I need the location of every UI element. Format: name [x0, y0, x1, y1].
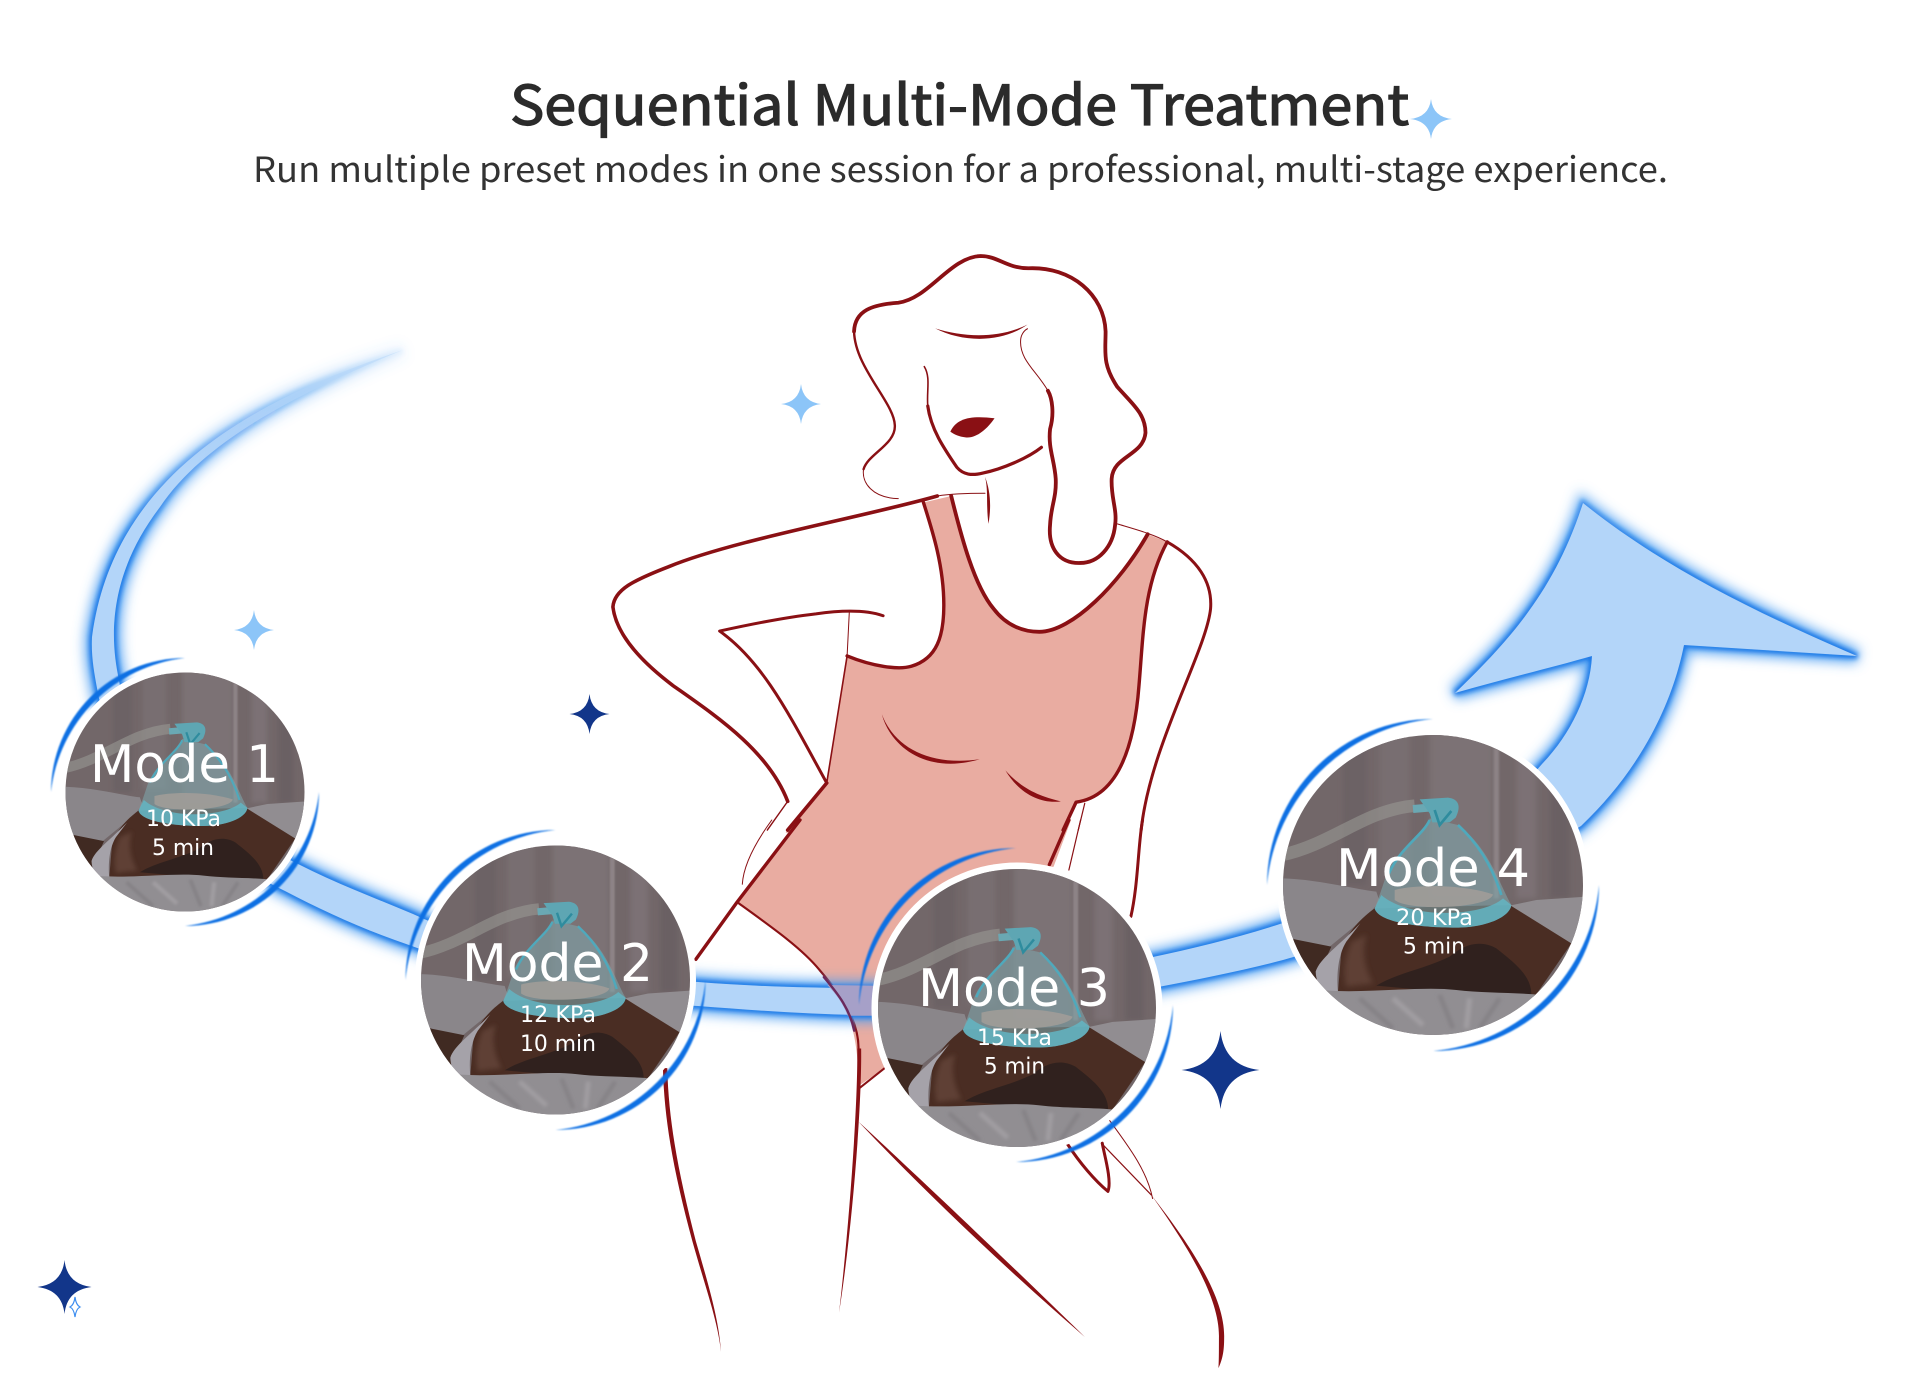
fringe [935, 325, 1028, 339]
mode 4 badge [1267, 719, 1599, 1051]
arcs mode 2 [406, 830, 706, 1130]
upper body outline [613, 256, 1211, 830]
photo mode 2 [418, 843, 693, 1117]
arm inner [720, 611, 883, 783]
label mode 1: 10 KPa [146, 807, 221, 832]
label mode 1 [90, 735, 279, 861]
arcs mode 3 [859, 848, 1173, 1162]
inner leg diagonal [859, 1122, 1085, 1337]
hand hook [1068, 1143, 1109, 1191]
bust curve right [1005, 770, 1061, 802]
sparkle: title [1410, 99, 1452, 139]
left thigh [663, 1068, 721, 1352]
label mode 2 [462, 934, 653, 1057]
mode 3 badge [859, 848, 1173, 1162]
label mode 1: 5 min [152, 836, 214, 861]
lips [950, 417, 995, 438]
photo mode 3 [875, 866, 1159, 1150]
dress upper [786, 496, 1167, 833]
thin arm end [742, 820, 772, 884]
band overlap on dress [824, 977, 880, 1031]
underarm thin line [847, 613, 849, 656]
thin hip line [1078, 803, 1085, 830]
label mode 2: 10 min [520, 1032, 596, 1057]
label mode 2: 12 KPa [520, 1003, 596, 1028]
dress hip edge [696, 820, 800, 959]
label mode 3: 5 min [984, 1054, 1045, 1080]
hair left side [854, 331, 895, 469]
sparkle: bottom left [38, 1260, 92, 1317]
sparkle: dark large [1182, 1031, 1260, 1109]
label mode 3 [918, 959, 1110, 1080]
photo mode 1 [63, 670, 307, 914]
label mode 4: 5 min [1403, 934, 1465, 960]
crotch edge [860, 1068, 885, 1088]
glowing progress band and arrow [92, 350, 1857, 1015]
arm top and hip [613, 496, 937, 801]
label mode 3: Mode 3 [918, 959, 1110, 1019]
right arm lower [1131, 820, 1143, 916]
label mode 4: Mode 4 [1336, 839, 1530, 899]
armhole [847, 502, 944, 668]
neckline [951, 496, 1148, 632]
label mode 2: Mode 2 [462, 934, 653, 994]
woman line-art figure [613, 256, 1224, 1368]
dress right lower [1049, 820, 1069, 865]
neck line [985, 477, 990, 524]
label mode 3: 15 KPa [977, 1026, 1052, 1051]
title: Sequential Multi-Mode Treatment [510, 61, 1409, 141]
label mode 1: Mode 1 [90, 735, 279, 795]
sparkle: left upper [234, 610, 274, 650]
inner thigh [839, 1049, 861, 1313]
right arm [1141, 542, 1211, 830]
hair thin strands [863, 329, 1048, 499]
thin right line [1069, 820, 1081, 870]
thin finger line [1109, 1120, 1153, 1199]
wrist to hip [767, 801, 788, 830]
dress right side [1063, 542, 1167, 830]
leg opening [737, 902, 859, 1049]
right leg [1151, 1195, 1224, 1368]
dress waist to hip [788, 783, 827, 830]
photo mode 4 [1280, 732, 1586, 1038]
mode 2 badge [406, 830, 706, 1130]
shoulder thin [937, 493, 985, 496]
face contour [928, 406, 1041, 474]
subtitle: Run multiple preset modes in one session for a professional, multi-stage experience. [253, 142, 1668, 193]
sparkle: near hair [781, 384, 821, 424]
mode 1 badge [51, 658, 319, 926]
dress left side [827, 656, 847, 783]
label mode 4 [1336, 839, 1530, 960]
sparkle: dark mid [570, 694, 610, 734]
arcs mode 4 [1267, 719, 1599, 1051]
right leg thin [1101, 1143, 1151, 1195]
hair [854, 256, 1145, 563]
lower body outline [663, 820, 1224, 1368]
label mode 4: 20 KPa [1396, 906, 1473, 931]
face upper thin [924, 367, 928, 406]
dress lower [737, 820, 1071, 1086]
arcs mode 1 [51, 658, 319, 926]
shoulder thin right [1117, 524, 1167, 542]
bust curve left [882, 714, 980, 764]
